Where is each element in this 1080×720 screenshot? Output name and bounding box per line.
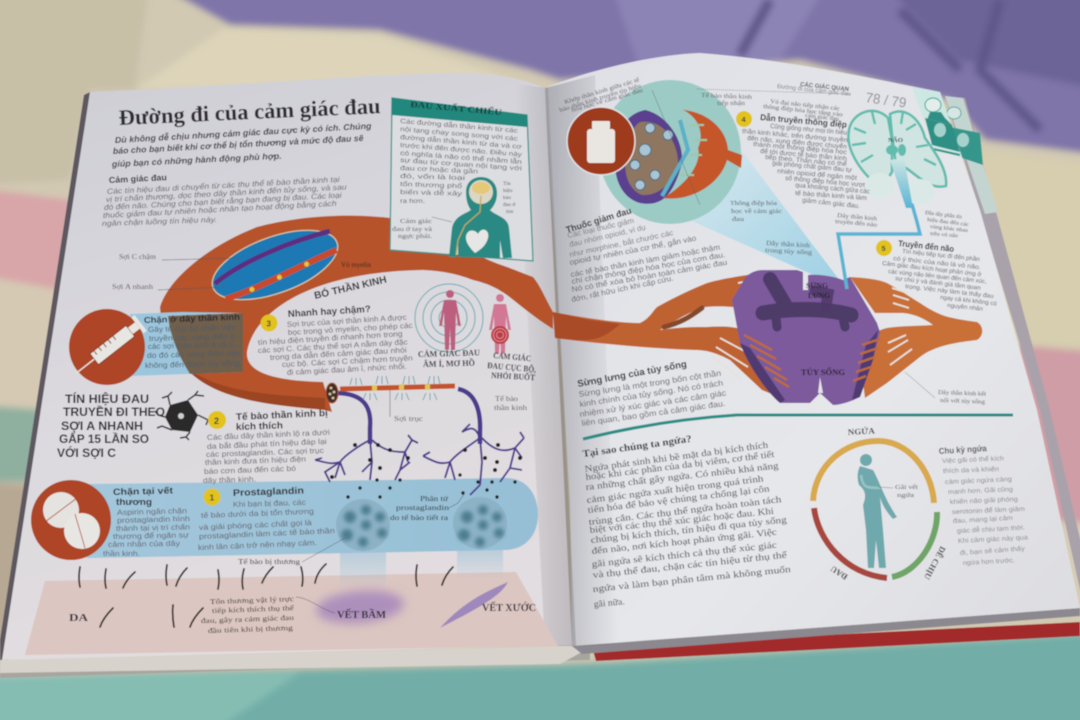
icon: number 3: 3 [266,320,272,328]
synapse circle [599,80,742,224]
panel: referred pain: trước khi đến được não. Điều này [400,140,523,159]
icon: scratching figure [858,454,897,568]
nerve to brain [838,190,920,289]
icon: aspirin pills [31,480,111,560]
page header: thông điệp hóa học tăng vào [763,104,843,118]
cone and brain labels: Đầu dây phần tín [925,209,963,221]
panel: referred pain: Các đường dẫn thần kinh từ các [400,116,519,135]
right nerve and spinal roots [553,272,982,400]
panel: referred pain: ra hơn. [400,198,425,205]
cone and brain labels: Dây thần kinh [837,212,877,222]
page header: Đường đi của cảm giác đau [777,83,851,98]
panel: block at wound: thành tại vị trí chấn [116,522,190,533]
panel: referred pain: đó, vốn là loại [400,171,465,182]
panel: irritated nerve cells: Các đầu dây thần kinh lộ ra dưới [207,428,330,442]
skin text: đầu tiên khi bị thương [208,624,294,635]
panel: message transmission: số thông điệp hóa học vượt [785,173,865,189]
skin text [69,595,536,635]
panel: referred pain: đau ở tay và [392,226,432,233]
pain type captions: NHÓI BUỐT [491,370,536,382]
intro text: Dù không dễ chịu nhưng cảm giác đau cực kỳ có ích. Chúng [115,121,373,145]
top-left synapse note: Tế bào thần kinh [701,92,752,101]
page header: Vỏ đại não tiếp nhận các [770,98,841,112]
panel: referred pain: đường dẫn thần kinh từ da và cơ [400,132,523,151]
panel: block at wound: thương để ngăn sự [113,530,189,541]
panel: message transmission: thành một thông điệp hóa học [753,141,848,156]
cone and brain labels: vùng khác nhau [930,224,968,234]
panel: itch cycle text: Việc gãi có thể kích [942,454,1004,465]
cone and brain labels: Thông điệp hóa [730,200,777,207]
lower blue band [87,478,538,558]
pain type captions: ÂM Ỉ, MƠ HỒ [423,358,475,369]
bundle heading: BÓ THẦN KINH [313,273,388,302]
panel: to the brain: Cảm giác đau kích hoạt phản ứng ở [882,260,982,278]
top-left synapse note [559,76,752,205]
spinal cord: SỪNG [806,280,828,290]
panel: to the brain: nguyên nhân [947,303,983,313]
nerve fibre with dendrites: thần kinh [494,404,528,412]
cone to spinal cord [685,150,847,290]
icon: dull pain body [415,284,483,352]
page corner teal [912,87,962,158]
scratch [440,582,508,628]
panel: message transmission: nhiên opioid để ngăn một [777,167,857,182]
panel: message transmission: thần kinh khác, trên đường truyền [742,126,849,144]
panel: dorsal horn: liên quan, bao gồm cả cảm giác đau. [581,399,726,428]
gutter shadow left [515,84,576,646]
icon: torso with pain path [449,177,512,258]
icon: neuron [155,391,208,440]
panel: to the brain: Truyền đến não [898,238,955,254]
panel: itch cycle text: mạnh hơn. Gãi cũng [948,486,1013,496]
pain type captions: ĐAU CỤC BỘ, [487,360,537,374]
nerve bundle [160,216,553,412]
panel: to the brain: các vùng não liên quan đến cảm xúc, [888,269,987,285]
panel: painkillers: Các loại thuốc giảm [566,216,635,240]
panel: message transmission: tế bào thần kinh và làm [795,188,867,202]
panel: irritated nerve cells: các prostaglandin. Các sợi trục [206,446,324,459]
panel: block at nerve: Gây tê cục bộ chặn việc [148,323,236,334]
panel: block at nerve: các sợi thần kinh A và C, [148,340,237,351]
damaged cell clusters [336,497,507,551]
panel: dorsal horn [577,359,727,428]
panel: itch cycle text: Khi cảm giác này qua [958,534,1028,545]
panel: referred pain: tim [506,209,514,215]
cell glow below band [340,540,503,590]
panel: why we itch: chúng bị kích thích, tín hiệu đi qua tủy sống [590,514,788,545]
panel: block at nerve [69,309,243,385]
panel: why we itch: đến não, nơi kích hoạt phản ứng gãi. Việc [591,527,777,556]
panel: to the brain: trọng. Việc này làm ta thấy đau [905,284,994,300]
icon: syringe [69,309,147,385]
panel: why we itch: trùng cắn. Các thụ thể ngứa hoàn toàn tách [588,494,782,527]
brain diagram: NÃO [888,136,903,144]
panel: painkillers: các tế bào thần kinh làm giảm hoặc thậm [570,242,721,279]
panel: itch cycle text: đi, bạn sẽ cảm thấy [960,543,1026,557]
hairs [79,564,453,627]
brain diagram [848,111,946,208]
skin text: DA [69,613,89,624]
panel: block at nerve: truyền các xung điện ở [149,332,236,343]
panel: prostaglandin: Prostaglandin [233,486,304,499]
page header: cảm giác đau [805,113,839,123]
page header [697,81,908,123]
panel: prostaglandin: kinh lân cận trở nên nhạy cảm. [198,538,317,552]
panel: referred pain: ĐAU XUẤT CHIẾU [410,99,502,117]
panel: prostaglandin [198,486,335,552]
panel: painkillers [565,205,728,304]
callout: signal speed: GẤP 15 LẦN SO [59,431,149,446]
panel: message transmission: Dẫn truyền thông điệp [760,112,847,130]
spinal cord [732,270,880,405]
intro text [111,121,373,169]
panel: block at wound: prostaglandin hình [117,514,190,525]
panel: referred pain: tổn thương phổ [400,180,463,190]
panel: why we itch: Tại sao chúng ta ngứa? [582,434,692,460]
panel: referred pain: báo [503,195,511,201]
intro text: báo cho bạn biết khi cơ thể bị tổn thương và mức độ đau sẽ [113,133,364,156]
panel: why we itch: gãi ngứa sẽ kích thích cả thụ thể xúc giác [591,540,777,569]
panel: block at wound: thần kinh. [103,549,140,558]
pain type captions: CẢM GIÁC ĐAU [418,347,480,359]
body: pain sensation: Cảm giác đau [109,172,167,185]
panel: block at nerve: do đó các xung điện này [147,349,240,360]
skin text: Tổn thương vật lý trực [210,595,294,606]
panel: referred pain: Cảm giác [400,218,432,225]
panel: irritated nerve cells: Tế bào thần kinh bị [236,408,328,423]
panel: fast or slow: Nhanh hay chậm? [288,304,371,320]
panel: block at wound: Chặn tại vết [113,485,173,497]
panel: prostaglandin: Khi bạn bị đau, các [233,498,306,509]
body: pain sensation: thuốc giảm đau tự nhiên hoặc nhân tạo hoạt động bằng cách [103,199,337,220]
panel: to the brain: sự chú ý và đánh giá tầm quan [895,276,981,292]
panel: fast or slow: cục bộ. Các sợi C chậm hơn truyền [282,353,413,369]
skin text: VẾT XƯỚC [482,601,536,614]
panel: prostaglandin: tế bào dưới da bị tổn thương [201,507,314,520]
panel: referred pain: ngực phải. [398,233,432,240]
panel: irritated nerve cells [203,408,330,485]
prostaglandin molecule label: do tế bào tiết ra [390,514,449,522]
callout: signal speed [57,391,165,460]
panel: referred pain: nội tạng chạy song song với các [400,126,519,143]
panel: message transmission: giải phóng chất giảm đau tự [772,158,853,174]
panel: fast or slow: Sợi trục của sợi thần kinh A được [287,313,407,329]
panel: to the brain: Tín hiệu tiếp tục đi đến phần [902,249,980,263]
panel: message transmission: Cũng giống như mọi tín hiệu [770,121,848,137]
nerve labels [112,253,372,291]
teal rule [583,415,1013,439]
panel: irritated nerve cells: báo cơn đau đến các bó [204,464,296,476]
panel: dorsal horn: Sừng lưng là một trong bốn cột thần [578,369,722,399]
callout: signal speed: SỢI A NHANH [61,419,143,433]
panel: irritated nerve cells: thần kinh đưa tín hiệu điện [205,454,306,467]
cone and brain labels: hiệu đau đến các [927,216,970,228]
panel: painkillers: chí chặn thông điệp hóa học của cơn đau. [571,250,726,286]
itch cycle chart: NGỨA [848,426,876,437]
panel: to the brain [876,238,998,313]
second page tab behind [945,96,998,214]
panel: dorsal horn: Sừng lưng của tủy sống [577,359,688,390]
panel: painkillers: Nó có thể xóa bỏ hoàn toàn cảm giác đau [571,258,728,294]
panel: why we itch: cảm giác ngứa xuất hiện trong quá trình [586,473,764,505]
intro text: giúp bạn có những hành động phù hợp. [111,151,282,169]
panel: referred pain: có nghĩa là não có thể nhầm lẫn [400,148,523,166]
prostaglandin molecule label: Phân tử [420,495,448,503]
top-left synapse note: bào thần kinh truyền tín hiệu [559,82,642,114]
panel: painkillers: đau nhóm opioid, ví dụ [568,223,646,249]
panel: referred pain: đau cơ hoặc da gần [400,163,479,175]
nerve cross-section [203,216,347,314]
itch cycle chart: Gãi vết [895,484,918,491]
callout: signal speed: TRUYỀN ĐI THEO [63,404,165,419]
nerve fibre with dendrites: Tế bào [495,395,519,403]
cone and brain labels: đau [732,216,745,223]
panel: dorsal horn: nhiệm xử lý xúc giác và các cảm giác [579,388,727,419]
nerve labels: Vỏ myelin [341,261,372,269]
icon: number 2: 2 [214,416,219,426]
panel: fast or slow [258,304,413,377]
panel: referred pain: biến và dễ xảy [400,187,463,198]
panel: why we itch [582,434,792,609]
icon: medicine bottle [567,107,635,175]
panel: painkillers: opioid tự nhiên của cơ thể, gắn vào [569,234,697,267]
body: pain sensation: Các tín hiệu đau di chuyển từ các thụ thể tế bào thần kinh tại [107,175,340,196]
panel: to the brain: ngay cả khi không có [940,295,998,308]
panel: painkillers: Thuốc giảm đau [565,205,633,235]
panel: referred pain [390,98,533,261]
body: pain sensation: vị trí chấn thương, dọc theo dây thần kinh đến tủy sống, và sau [106,182,348,204]
panel: fast or slow: tín hiệu điện truyền đi nhanh hơn trong [258,329,403,347]
panel: itch cycle text: ngứa hơn trước. [963,557,1015,567]
top-left synapse note: Khớp thần kinh giữa các tế [564,76,641,106]
icon: number 4: 4 [742,115,746,124]
panel: prostaglandin: và giải phóng các chất gọi là [199,518,313,532]
panel: itch cycle text: thích da và khiến [943,464,999,475]
gutter shadow right [545,75,618,646]
top-left synapse note: hóa học về cảm giác đau [571,87,644,114]
panel: itch cycle text: cảm giác ngứa càng [945,476,1012,486]
panel: block at nerve: không đến được tủy sống. [145,358,242,370]
damaged cell label: Tế bào bị thương [238,558,301,566]
panel: prostaglandin: prostaglandin làm các tế bào thần [199,526,335,541]
panel: block at wound: cảm nhận của dây [108,539,180,549]
nerve fibre with dendrites: Sợi trục [394,415,423,423]
panel: why we itch: ra những chất gây ngứa. Có nhiều khả năng [585,460,780,492]
panel: why we itch: biệt với các thụ thể xúc giác hoặc đau. Khi [589,506,775,535]
panel: referred pain: Tín [503,181,511,187]
panel: message transmission: tiếp theo. Thân não có thể [765,152,848,168]
bruise [315,587,405,627]
prostaglandin molecule label: prostaglandin [396,504,450,512]
left page [2,73,572,660]
skin text: tiếp kích thích thụ thể [212,604,295,615]
panel: irritated nerve cells: da bắt đầu phát tín hiệu đáp lại [207,437,327,451]
panel: block at wound [31,480,190,560]
cone and brain labels [730,200,987,406]
panel: block at nerve: Chặn ở dây thần kinh [144,312,240,325]
panel: message transmission: giảm cảm giác đau. [802,197,860,210]
nerve labels: Sợi A nhanh [112,283,154,291]
nerve labels: Sợi C chậm [119,253,157,261]
panel: itch cycle text: đau, mang lại cảm [953,515,1013,525]
cone and brain labels: học về cảm giác [731,208,782,215]
icon: number 3 [260,314,278,332]
panel: message transmission [736,111,871,210]
cone and brain labels: trên vỏ não [930,231,959,239]
panel: referred pain: sự đau từ cơ quan nội tạng với [400,157,522,173]
skin layer [25,572,558,655]
panel: message transmission: để tới được tế bào thần kinh [760,146,848,163]
spinal cord: LƯNG [808,291,830,300]
panel: block at wound: Aspirin ngăn chặn [117,506,187,517]
cone and brain labels: nối với tủy sống [940,397,985,406]
panel: why we itch: hoặc khi các phần của da bị viêm, cơ thể tiết [585,449,775,482]
skin text: VẾT BẦM [337,608,387,621]
panel: itch cycle text: serotonin để làm giảm [952,505,1025,516]
panel: to the brain: có ý thức của não là vỏ não. [893,255,981,271]
itch cycle chart [813,426,948,582]
panel: itch cycle text: khiến não giải phóng [950,494,1018,506]
callout: signal speed: VỚI SỢI C [57,445,116,460]
icon: number 5: 5 [882,244,886,253]
page header: 78 / 79 [865,89,908,111]
panel: referred pain: đau ở [503,202,515,208]
panel: block at wound: thương [116,497,152,507]
panel: itch cycle text [939,443,1028,567]
pain type captions: CẢM GIÁC [493,350,532,363]
cone and brain labels: truyền đến não [835,218,877,229]
panel: referred pain: hiệu [503,188,513,194]
right page [545,53,1080,646]
callout: signal speed: TÍN HIỆU ĐAU [65,391,149,406]
icon: local pain body [489,294,511,354]
panel: why we itch: và thụ thể đau, chặn các tín hiệu từ thụ thể [592,550,788,580]
icon: number 1: 1 [210,492,214,502]
body: pain sensation: đó đến não. Chúng cho bạn biết rằng bạn đang bị đau. Các loại [104,191,342,212]
panel: why we itch: gãi nữa. [593,596,625,609]
panel: message transmission: qua khoảng cách giữa các [795,182,871,196]
nerve fibre with dendrites [315,376,528,499]
icon: teal head [925,98,960,155]
panel: why we itch: tiến hóa để bảo vệ chúng ta chống lại côn [587,483,770,515]
prostaglandin molecule label [390,494,464,522]
body: pain sensation: ngăn chặn luồng tín hiệu này. [102,215,217,228]
title: Đường đi của cảm giác đau [118,93,381,130]
itch cycle chart: DỄ CHỊU [922,545,948,581]
cone and brain labels: Dây thần kinh [766,240,811,249]
panel: fast or slow: các sợi C. Các thụ thể sợi A nằm dày đặc [258,337,408,355]
skin text: đau, gây ra cảm giác đau [201,614,295,625]
pain type captions [418,347,537,382]
panel: why we itch: ngứa và làm bạn phân tâm mà không muốn [592,564,792,594]
panel: irritated nerve cells: dây thần kinh. [203,475,256,485]
panel: fast or slow: bọc trong vỏ myelin, cho phép các [288,321,413,337]
panel: fast or slow: đi cảm giác đau âm ỉ, nhức nhối. [287,362,407,377]
panel: why we itch: Ngứa phát sinh khi bề mặt da bị kích thích [584,440,769,474]
panel: painkillers: như morphine, bắt chước các [569,228,674,259]
spinal cord: TỦY SỐNG [801,367,845,377]
cone and brain labels: Dây thần kinh kết [938,389,987,398]
panel: irritated nerve cells: kích thích [236,420,283,433]
panel: fast or slow: trong da dẫn đến cảm giác đau nhói [270,345,407,362]
page header: CÁC GIÁC QUAN [800,81,849,93]
panel: itch cycle text: Chu kỳ ngứa [939,443,987,456]
panel: message transmission: đến não, xung điện được chuyển [747,133,848,151]
panel: dorsal horn: kinh chính của tủy sống. Nó có trách [579,378,724,409]
itch cycle chart: ngứa [897,493,914,499]
top-left synapse note: tiếp nhận [717,100,745,107]
cone and brain labels: trong tủy sống [765,247,813,257]
panel: painkillers: đớn, rất hữu ích khi cấp cứu. [571,274,674,304]
itch cycle chart: ĐAU [829,564,849,582]
damaged cell label [238,538,345,566]
panel: itch cycle text: giác dễ chịu tạm thời. [957,522,1025,535]
body: pain sensation [102,172,348,228]
